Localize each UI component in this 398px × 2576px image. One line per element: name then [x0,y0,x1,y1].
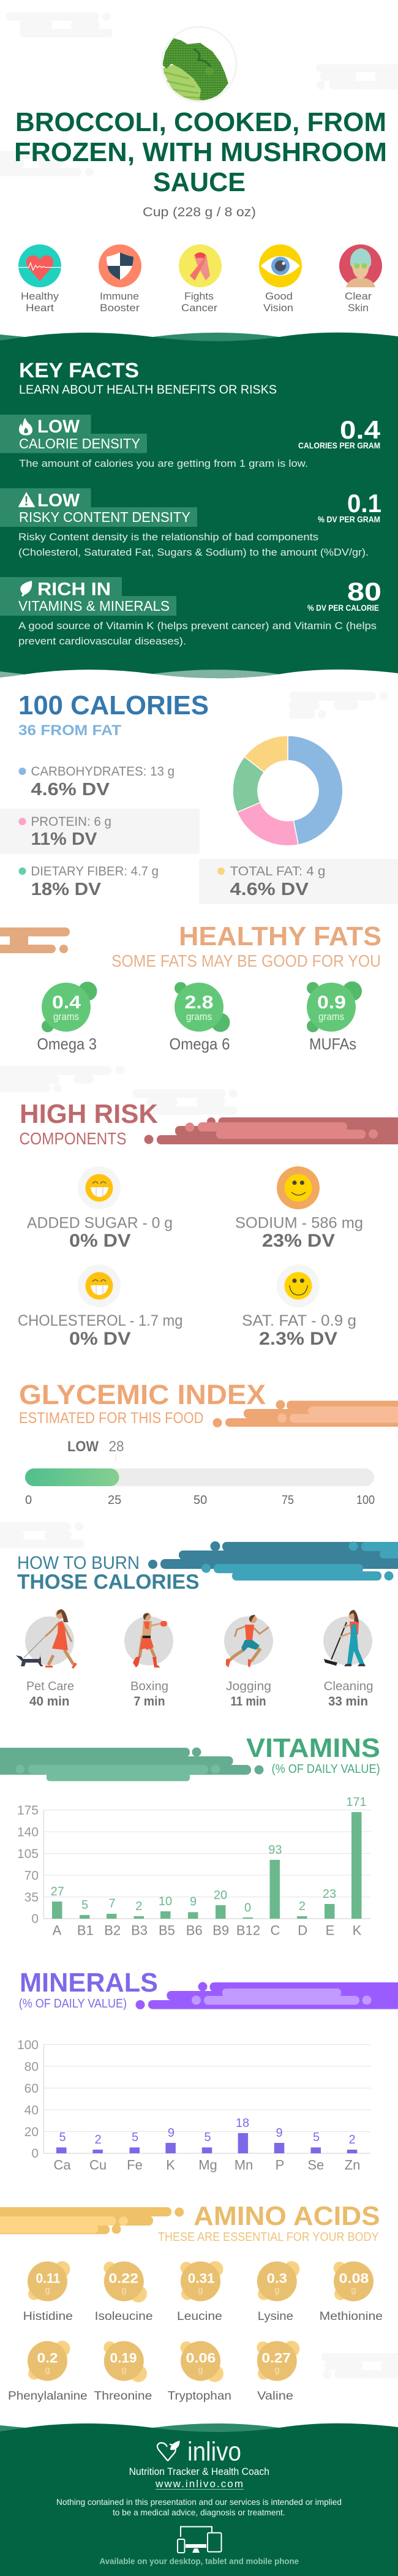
bar chart: vitamins: 10 [159,1895,172,1908]
item: cholesterol [18,1264,182,1349]
logo: inlivo: inlivo [187,2437,241,2467]
decorative header shape [136,1982,398,2009]
subheading: 36 FROM FAT [18,722,121,739]
title [14,107,387,197]
stat: leucine [177,2261,223,2323]
legend: carbohydrates: 4.6% DV [31,780,110,799]
label: benefit names: Cancer [181,302,217,314]
stat: omega 6: Omega 6 [169,1035,230,1053]
hero: broccoli image [162,27,236,102]
label: benefit names: Skin [348,302,369,314]
legend: protein [18,815,111,849]
bar chart: minerals: 2 [94,2133,102,2147]
stat: tryptophan: Tryptophan [168,2389,231,2403]
bar chart: vitamins: 171 [346,1796,367,1809]
activity: jogging [224,1615,273,1668]
activity durations: 11 min [230,1694,266,1709]
stat: lysine: 0.3 [267,2270,287,2286]
bar chart: minerals: 100 [17,2038,39,2052]
subheading: (% OF DAILY VALUE) [19,1997,127,2011]
decorative cloud [0,1522,85,1548]
bar chart: vitamins: 2 [135,1900,142,1913]
bar chart: minerals: Mg [198,2157,217,2172]
activity durations: 33 min [328,1694,368,1709]
availability note: Available on your desktop, tablet and mobile phone [99,2556,299,2566]
stat: isoleucine: Isoleucine [95,2310,153,2323]
bar chart: vitamins: 93 [268,1843,282,1857]
bar chart: vitamins: 35 [24,1890,39,1905]
bar chart: vitamins: B9 [212,1923,229,1938]
bar chart: vitamins: B6 [186,1923,203,1938]
bar chart: minerals: 20 [24,2125,39,2139]
fact: rich in vitamins and minerals: prevent cardiovascular diseases). [18,635,186,647]
legend: total fat: 4.6% DV [230,880,309,899]
fact: risky content density: Risky Content density is the relationship of bad components [18,531,318,543]
stat: mufas: MUFAs [309,1035,356,1053]
stat: phenylalanine: g [45,2365,50,2375]
stat: threonine: g [121,2365,126,2375]
stat: threonine [94,2341,152,2403]
item: cholesterol: 0% DV [69,1329,131,1349]
bar chart: minerals: 18 [236,2117,249,2130]
icon: healthy heart [18,244,61,287]
fact: calorie density: LOW [37,417,80,437]
item: sodium: 23% DV [262,1231,335,1251]
label: benefit names: Vision [263,302,293,314]
decorative header shape [0,1747,263,1781]
stat: phenylalanine [8,2341,88,2403]
stat: valine: 0.27 [261,2351,291,2366]
bar chart: minerals: Mn [235,2157,253,2172]
bar chart: vitamins: 70 [24,1868,39,1883]
decorative header shape [0,927,70,953]
stat: threonine: 0.19 [110,2351,137,2366]
fact: rich in vitamins and minerals: VITAMINS & MINERALS [18,598,170,614]
heading: 100 CALORIES [18,690,209,720]
decorative cloud [321,2353,398,2379]
bar chart: vitamins: C [270,1923,280,1938]
stat: lysine: g [274,2285,279,2295]
bar chart: minerals: 9 [276,2126,283,2140]
stat: histidine: g [45,2285,50,2295]
bar chart: vitamins: D [298,1923,307,1938]
stat: isoleucine: g [121,2285,126,2295]
decorative header shape [0,2207,184,2234]
bar chart: minerals: Fe [127,2157,143,2172]
tagline: Nutrition Tracker & Health Coach [129,2466,269,2477]
activity: boxing [124,1612,173,1668]
decorative header shape [213,1400,398,1427]
legend: carbohydrates: CARBOHYDRATES: 13 g [31,765,175,779]
bar chart: vitamins: 5 [81,1898,88,1912]
panel: minerals [17,1968,398,2172]
bar chart: vitamins: 0 [244,1902,251,1915]
item: added sugar: ADDED SUGAR - 0 g [27,1214,173,1231]
subheading: COMPONENTS [20,1129,126,1148]
stat: mufas: 0.9 [317,992,346,1013]
decorative cloud centre [132,1089,238,1115]
stat: methionine: Methionine [320,2310,383,2323]
panel: vitamins [0,1733,380,1938]
stat: omega 6 [169,982,230,1053]
legend: total fat [217,864,326,899]
bar chart: minerals: 80 [24,2060,39,2074]
legend: protein: PROTEIN: 6 g [31,815,111,829]
title: SAUCE [153,167,246,197]
item: saturated fat: SAT. FAT - 0.9 g [242,1312,356,1329]
item: saturated fat: 2.3% DV [259,1329,337,1349]
activity durations [29,1694,368,1709]
legend: dietary fiber [18,864,159,899]
activity: cleaning [323,1610,372,1666]
bar chart: vitamins: 27 [51,1885,64,1898]
decorative header shape [145,1117,398,1144]
heading: MINERALS [20,1968,158,1998]
stat: leucine: 0.31 [188,2270,215,2286]
bar chart: minerals: 40 [24,2104,39,2117]
stat: methionine: 0.08 [339,2270,369,2286]
stat: valine: Valine [257,2389,293,2403]
stat: omega 3 [37,981,97,1053]
disclaimer: Nothing contained in this presentation and our services is intended or implied [56,2497,342,2507]
bar chart: minerals [17,2038,370,2172]
stat: lysine: Lysine [258,2310,293,2323]
label: benefit names [21,290,372,314]
panel: how to burn calories [16,1541,398,1709]
decorative cloud top right [316,64,398,89]
item: cholesterol: CHOLESTEROL - 1.7 mg [18,1312,182,1329]
bar chart: minerals: 2 [348,2133,356,2147]
serving size: Cup (228 g / 8 oz) [143,205,256,219]
stat: omega 6: grams [186,1011,212,1022]
icon: warning triangle [18,492,35,507]
fact: calorie density: CALORIES PER GRAM [298,441,380,450]
icon row: health benefits [18,244,382,314]
bar chart: vitamins: B2 [104,1923,121,1938]
bar chart: vitamins: 9 [190,1895,197,1909]
stat: mufas [307,981,362,1053]
stat: isoleucine [95,2262,153,2323]
gauge bar [25,1468,374,1486]
fact: risky content density: 0.1 [347,489,381,518]
bar chart: minerals: K [166,2157,175,2172]
stat: tryptophan [168,2341,231,2403]
stat: valine [257,2341,299,2403]
activity durations: 7 min [133,1694,165,1709]
gauge axis labels: 50 [193,1494,207,1507]
marker: low 28 [67,1438,124,1461]
label: benefit names: Healthy [21,290,59,302]
bar chart: minerals: P [276,2157,284,2172]
activity labels: Jogging [226,1679,271,1693]
activity labels [26,1679,374,1693]
icon: immune booster shield [99,244,141,287]
fact: calorie density: CALORIE DENSITY [19,436,140,451]
marker: low 28: 28 [109,1438,124,1455]
heading: HOW TO BURN [17,1553,140,1573]
fact: rich in vitamins and minerals: RICH IN [37,580,111,599]
decorative cloud left of title [0,151,94,176]
icon: leaf [20,581,32,597]
bar chart: vitamins: K [353,1923,362,1938]
fact: risky content density [0,488,381,558]
bar chart: vitamins: A [53,1923,62,1938]
stat: methionine: g [351,2285,356,2295]
legend: protein: 11% DV [31,829,97,849]
activity labels: Boxing [130,1679,168,1693]
bar chart: minerals: Zn [345,2157,360,2172]
title: FROZEN, WITH MUSHROOM [14,137,387,167]
stat: tryptophan: 0.06 [186,2351,216,2366]
fact: risky content density: RISKY CONTENT DENSITY [19,509,190,525]
icon: devices [178,2526,222,2553]
panel: key facts [0,333,398,678]
icon: fights cancer ribbon [179,244,222,287]
stat: mufas: grams [318,1011,344,1022]
stat: methionine [320,2262,383,2323]
gauge axis labels: 75 [282,1494,294,1507]
website link: www.inlivo.com [155,2478,243,2490]
heading: GLYCEMIC INDEX [19,1379,266,1410]
legend: carbohydrates [18,765,175,799]
item: added sugar [27,1166,173,1251]
bar chart: minerals: 9 [168,2126,175,2140]
stat: isoleucine: 0.22 [108,2270,138,2286]
gauge axis labels: 0 [25,1494,32,1507]
bar chart: minerals: 60 [24,2082,39,2096]
bar chart: vitamins: B3 [131,1923,148,1938]
label: benefit names: Booster [100,302,140,314]
panel backgrounds [0,809,398,904]
stat: omega 3: 0.4 [52,992,81,1013]
fact: rich in vitamins and minerals: % DV PER CALORIE [307,603,379,613]
bar chart: minerals: 5 [132,2131,138,2144]
subheading: ESTIMATED FOR THIS FOOD [19,1410,203,1427]
activity durations: 40 min [29,1694,70,1709]
gauge axis labels: 25 [108,1494,121,1507]
stat: histidine: 0.11 [36,2270,60,2286]
heading: HIGH RISK [20,1099,158,1129]
stat: tryptophan: g [198,2365,203,2375]
heading: KEY FACTS [19,359,139,382]
bar chart: vitamins: B12 [236,1923,260,1938]
title: BROCCOLI, COOKED, FROM [15,107,386,137]
bar chart: minerals: 5 [59,2131,66,2144]
panel: healthy fats [0,921,381,1053]
icon: good vision eye [259,244,302,287]
stat: valine: g [274,2365,279,2375]
bar chart: minerals: 5 [313,2131,320,2144]
decorative cloud top left [6,12,113,37]
disclaimer [56,2497,342,2517]
heading [19,359,277,397]
bar chart: vitamins: 105 [17,1847,39,1861]
bar chart: vitamins: 0 [31,1912,39,1926]
label: benefit names: Fights [184,290,214,302]
bar chart: vitamins [17,1796,370,1938]
heading: VITAMINS [246,1733,380,1763]
bar chart: minerals: Cu [89,2157,107,2172]
item: sodium [235,1166,363,1251]
fact: risky content density: (Cholesterol, Saturated Fat, Sugars & Sodium) to the amount (%DV/gr). [18,546,369,558]
label: benefit names: Clear [345,290,372,302]
stat: histidine: Histidine [23,2310,73,2323]
item: saturated fat [242,1264,356,1349]
decorative cloud [289,692,388,719]
panel: high risk components [18,1099,398,1349]
bar chart: vitamins: 7 [108,1897,116,1911]
fact: risky content density: LOW [37,490,80,511]
icon: clear skin [339,244,382,287]
stat: phenylalanine: 0.2 [37,2351,58,2366]
activity labels: Pet Care [26,1679,74,1693]
bar chart: vitamins: E [326,1923,334,1938]
stat: threonine: Threonine [94,2389,152,2403]
activity labels: Cleaning [324,1679,374,1693]
stat: omega 3: Omega 3 [37,1035,97,1053]
fact: calorie density: The amount of calories you are getting from 1 gram is low. [19,458,308,469]
item: added sugar: 0% DV [69,1231,131,1251]
bar chart: vitamins: B5 [159,1923,175,1938]
fact: rich in vitamins and minerals: A good source of Vitamin K (helps prevent cancer) and Vitamin C (helps [18,620,377,632]
bar chart: vitamins: 2 [299,1900,306,1913]
icon: flame [19,418,32,435]
bar chart: minerals: 0 [31,2147,39,2161]
item: sodium: SODIUM - 586 mg [235,1214,363,1231]
label: benefit names: Good [265,290,293,302]
bar chart: vitamins: B1 [77,1923,94,1938]
donut chart [233,736,343,846]
disclaimer: to be a medical advice, diagnosis or treatment. [113,2507,285,2517]
stat: omega 6: 2.8 [185,992,213,1013]
stat: leucine: Leucine [177,2310,222,2323]
subheading: (% OF DAILY VALUE) [272,1762,380,1776]
heading: HEALTHY FATS [179,921,381,951]
logo: inlivo [157,2437,241,2467]
fact: calorie density: 0.4 [340,415,381,444]
bar chart: minerals: Se [307,2157,324,2172]
bar chart: minerals: Ca [54,2157,71,2172]
subheading: THESE ARE ESSENTIAL FOR YOUR BODY [158,2230,379,2244]
gauge axis labels [25,1494,375,1507]
bar chart: vitamins: 23 [323,1887,336,1901]
panel: footer [0,2423,398,2576]
panel: amino acids [0,2201,383,2403]
bar chart: minerals: 5 [204,2131,211,2144]
bar chart: vitamins: 20 [214,1889,227,1902]
decorative cloud left [0,1066,124,1092]
bar chart: vitamins: 175 [17,1804,39,1818]
stat: lysine [257,2261,299,2323]
label: benefit names: Immune [100,290,139,302]
stat: phenylalanine: Phenylalanine [8,2389,88,2403]
bar chart: vitamins: 140 [17,1826,39,1839]
marker: low 28: LOW [67,1438,99,1455]
legend: total fat: TOTAL FAT: 4 g [230,864,326,878]
fact: calorie density [0,415,381,469]
stat: leucine: g [198,2285,203,2295]
heading: AMINO ACIDS [193,2201,380,2231]
panel: glycemic index [19,1379,398,1507]
legend: dietary fiber: 18% DV [31,880,102,899]
fact: risky content density: % DV PER GRAM [318,515,380,524]
fact: rich in vitamins and minerals: 80 [347,577,381,606]
activity: pet care [16,1609,77,1669]
heading: LEARN ABOUT HEALTH BENEFITS OR RISKS [19,383,277,397]
stat: histidine [23,2261,73,2323]
label: benefit names: Heart [26,302,54,314]
stat: omega 3: grams [53,1011,79,1022]
legend: dietary fiber: DIETARY FIBER: 4.7 g [31,864,159,878]
gauge axis labels: 100 [356,1494,375,1507]
panel: calories [0,690,398,904]
decorative header shape [148,1541,398,1581]
fact: rich in vitamins and minerals [0,577,381,647]
heading: THOSE CALORIES [17,1571,200,1594]
heading [17,1553,200,1594]
